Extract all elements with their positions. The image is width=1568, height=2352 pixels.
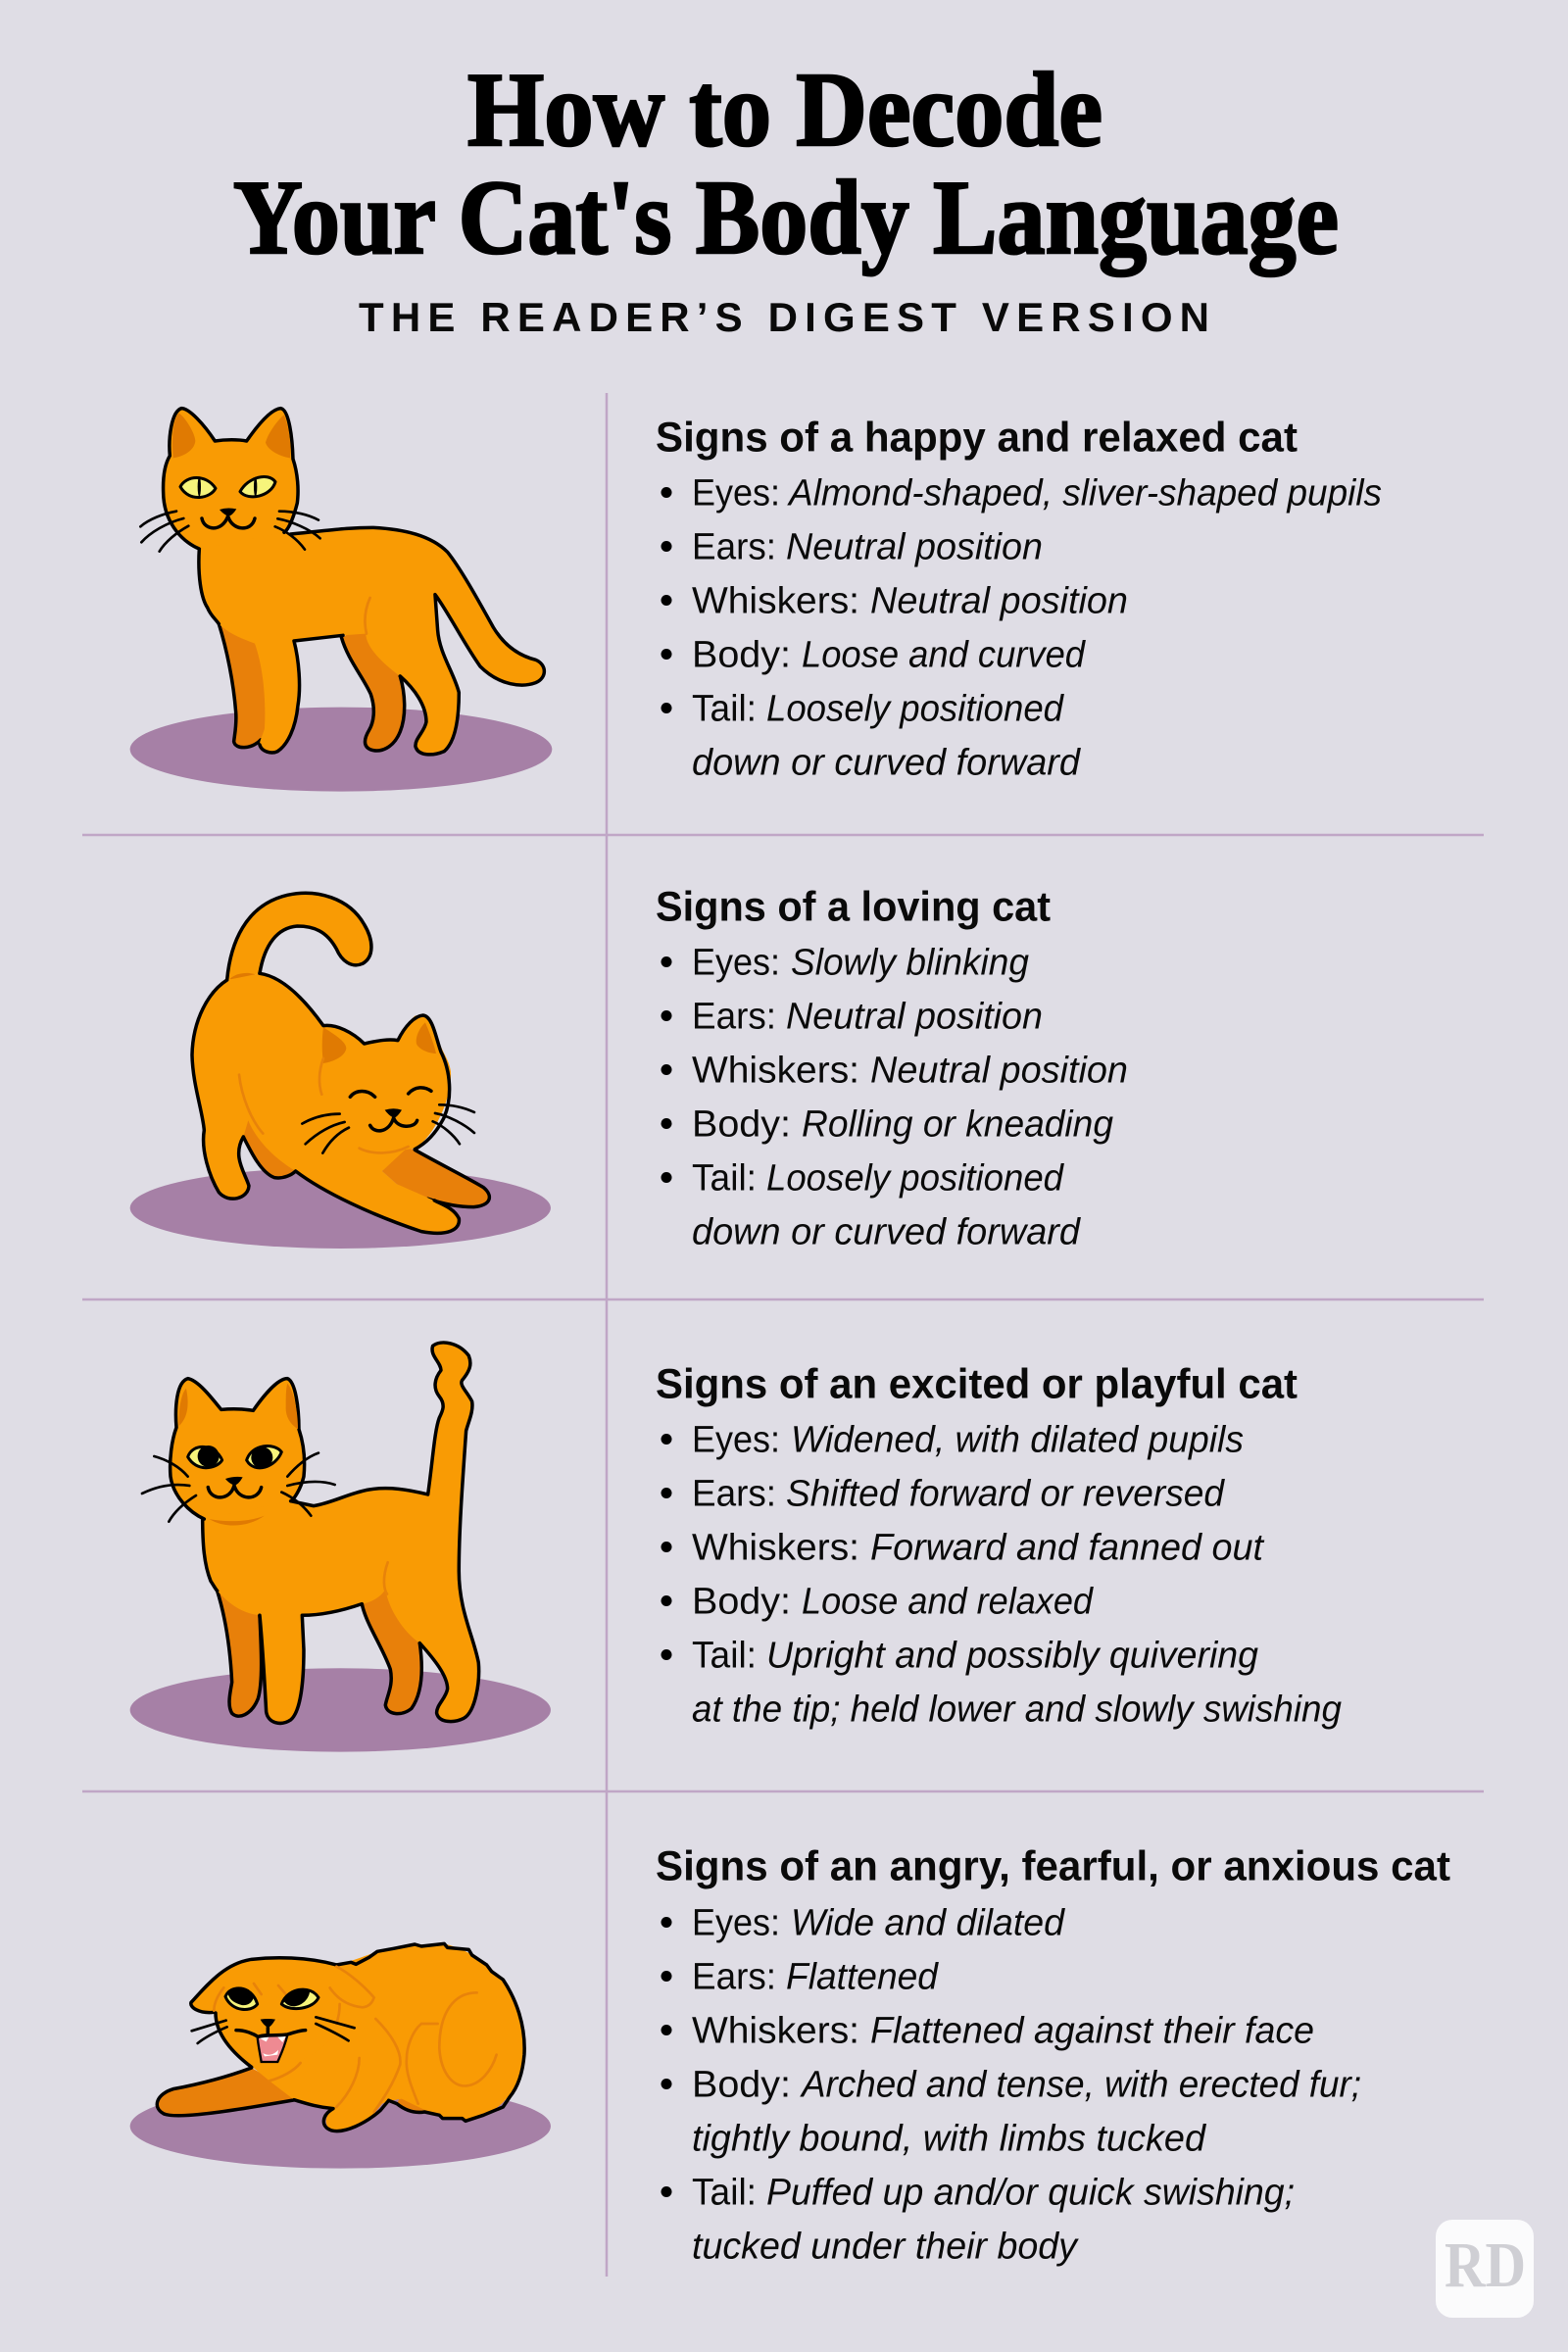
panel: loving cat text: Whiskers: xyxy=(692,1051,859,1092)
panel: angry, fearful, or anxious cat text: Body: xyxy=(692,2064,791,2105)
panel: angry, fearful, or anxious cat text xyxy=(656,1842,1450,2268)
logo: RD badge xyxy=(1436,2220,1534,2318)
title: How to Decode xyxy=(467,52,1102,169)
panel: excited or playful cat text: Eyes: xyxy=(692,1419,780,1460)
panel: excited or playful cat text: Signs of an excited or playful cat xyxy=(656,1360,1298,1407)
panel: loving cat text: down or curved forward xyxy=(692,1211,1082,1252)
panel: excited or playful cat text xyxy=(656,1360,1342,1731)
title xyxy=(233,52,1339,276)
panel: loving cat text: Ears: xyxy=(692,996,776,1037)
panel: loving cat text: Neutral position xyxy=(786,996,1043,1037)
panel: loving cat text: Neutral position xyxy=(870,1051,1128,1092)
panel: angry, fearful, or anxious cat text: tucked under their body xyxy=(692,2227,1079,2268)
panel: loving cat text: Rolling or kneading xyxy=(802,1103,1113,1145)
panel: excited or playful cat text: Shifted forward or reversed xyxy=(786,1474,1226,1515)
panel: angry, fearful, or anxious cat text: Tail: xyxy=(692,2172,757,2213)
panel: excited or playful cat text: at the tip; held lower and slowly swishing xyxy=(692,1690,1342,1731)
panel: excited or playful cat text: Body: xyxy=(692,1582,791,1623)
panel: loving cat text: Body: xyxy=(692,1103,791,1145)
panel: loving cat text: Signs of a loving cat xyxy=(656,884,1051,931)
panel: happy and relaxed cat text: Tail: xyxy=(692,688,757,729)
panel: angry, fearful, or anxious cat text: Puffed up and/or quick swishing; xyxy=(766,2172,1295,2213)
panel: excited or playful cat text: Widened, with dilated pupils xyxy=(791,1419,1244,1460)
panel: happy and relaxed cat text: down or curved forward xyxy=(692,743,1082,784)
panel: loving cat text: Slowly blinking xyxy=(791,943,1029,984)
illustration: angry, fearful, or anxious cat xyxy=(130,1943,551,2169)
panel: happy and relaxed cat text: Loosely positioned xyxy=(766,688,1065,729)
panel: angry, fearful, or anxious cat text: Arched and tense, with erected fur; xyxy=(800,2064,1361,2105)
panel: angry, fearful, or anxious cat text: Signs of an angry, fearful, or anxious cat xyxy=(656,1842,1450,1889)
panel: happy and relaxed cat text: Ears: xyxy=(692,527,776,568)
panel: angry, fearful, or anxious cat text: Flattened against their face xyxy=(870,2011,1314,2052)
panel: excited or playful cat text: Ears: xyxy=(692,1474,776,1515)
subtitle: THE READER’S DIGEST VERSION xyxy=(359,294,1209,340)
panel: angry, fearful, or anxious cat text: Whiskers: xyxy=(692,2011,859,2052)
panel: happy and relaxed cat text xyxy=(656,414,1382,784)
panel: angry, fearful, or anxious cat text: tightly bound, with limbs tucked xyxy=(692,2119,1207,2160)
panel: happy and relaxed cat text: Almond-shaped, sliver-shaped pupils xyxy=(787,472,1382,514)
panel: excited or playful cat text: Loose and relaxed xyxy=(802,1582,1095,1623)
panel: angry, fearful, or anxious cat text: Flattened xyxy=(786,1956,940,1997)
panel: excited or playful cat text: Whiskers: xyxy=(692,1527,859,1568)
panel: loving cat text xyxy=(656,884,1128,1252)
panel: excited or playful cat text: Tail: xyxy=(692,1635,757,1676)
logo: RD badge: RD xyxy=(1445,2230,1526,2301)
panel: excited or playful cat text: Upright and possibly quivering xyxy=(766,1635,1258,1676)
title: Your Cat's Body Language xyxy=(233,160,1339,276)
panel: angry, fearful, or anxious cat text: Wide and dilated xyxy=(791,1903,1066,1944)
panel: angry, fearful, or anxious cat text: Ears: xyxy=(692,1956,776,1997)
panel: happy and relaxed cat text: Whiskers: xyxy=(692,580,859,621)
panel: loving cat text: Eyes: xyxy=(692,943,780,984)
panel: happy and relaxed cat text: Neutral position xyxy=(786,527,1043,568)
panel: happy and relaxed cat text: Body: xyxy=(692,635,791,676)
panel: excited or playful cat text: Forward and fanned out xyxy=(870,1527,1264,1568)
panel: happy and relaxed cat text: Neutral position xyxy=(870,580,1128,621)
panel: happy and relaxed cat text: Loose and curved xyxy=(802,635,1087,676)
illustration: excited or playful cat xyxy=(130,1343,551,1752)
panel: loving cat text: Loosely positioned xyxy=(766,1158,1065,1200)
panel: loving cat text: Tail: xyxy=(692,1158,757,1200)
panel: happy and relaxed cat text: Signs of a happy and relaxed cat xyxy=(656,414,1298,461)
panel: happy and relaxed cat text: Eyes: xyxy=(692,472,780,514)
illustration: happy and relaxed cat xyxy=(130,409,552,792)
illustration: loving cat xyxy=(130,893,551,1249)
panel: angry, fearful, or anxious cat text: Eyes: xyxy=(692,1903,780,1944)
